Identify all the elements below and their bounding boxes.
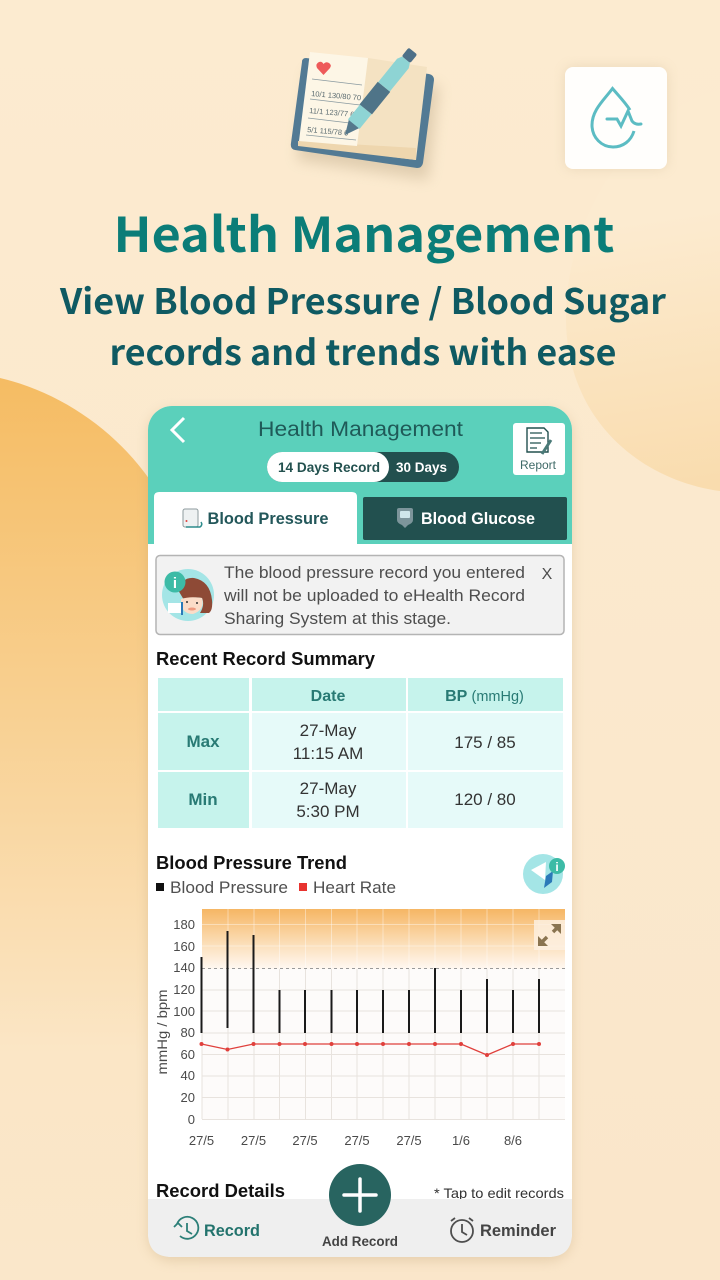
bottom navigation: Record xyxy=(204,1222,260,1240)
icon: notebook and pen xyxy=(291,46,439,180)
bottom navigation xyxy=(148,1199,572,1257)
heading: blood pressure trend: Blood Pressure Trend xyxy=(156,853,347,873)
app header bar xyxy=(148,406,572,544)
x axis labels xyxy=(189,1133,522,1148)
line and bar chart xyxy=(154,909,565,1148)
summary table: Min xyxy=(188,790,218,809)
y axis labels: 160 xyxy=(173,939,195,954)
icon: app droplet tile xyxy=(565,67,667,169)
icon: back arrow xyxy=(172,418,184,442)
y axis labels: 120 xyxy=(173,982,195,997)
icon: notebook and pen: 5/1 115/78 6 xyxy=(307,125,349,138)
y axis labels: 100 xyxy=(173,1004,195,1019)
y axis labels: 40 xyxy=(181,1068,195,1083)
add record button xyxy=(329,1164,391,1226)
summary table: Max xyxy=(186,732,220,751)
y axis labels: 180 xyxy=(173,917,195,932)
subtitle xyxy=(59,274,667,376)
summary table: 175 / 85 xyxy=(454,733,516,752)
summary table: 5:30 PM xyxy=(296,802,360,821)
icon: heart xyxy=(316,62,331,75)
summary table: 11:15 AM xyxy=(293,744,363,763)
screen title: Health Management xyxy=(258,417,463,441)
summary table: Date xyxy=(311,688,345,705)
subtitle: records and trends with ease xyxy=(110,325,616,376)
y axis labels: 60 xyxy=(181,1047,195,1062)
x axis labels: 27/5 xyxy=(344,1133,370,1148)
x axis labels: 27/5 xyxy=(292,1133,318,1148)
period toggle xyxy=(267,452,459,482)
grid xyxy=(202,969,565,1120)
close button: X xyxy=(542,566,553,583)
notice text: The blood pressure record you entered xyxy=(224,564,525,582)
heading: record details: Record Details xyxy=(156,1181,285,1201)
tab: blood glucose xyxy=(363,497,567,540)
icon: info megaphone xyxy=(523,854,565,894)
icon: nurse avatar xyxy=(162,569,214,621)
notice text xyxy=(223,564,525,628)
report button: Report xyxy=(520,458,557,472)
x axis labels: 1/6 xyxy=(452,1133,470,1148)
x axis labels: 27/5 xyxy=(396,1133,422,1148)
add record label: Add Record xyxy=(322,1234,398,1249)
chart legend: Heart Rate xyxy=(313,879,396,897)
summary table: BP (mmHg) xyxy=(445,688,524,705)
report button xyxy=(513,423,565,475)
chart legend: Blood Pressure xyxy=(170,879,288,897)
summary table xyxy=(158,678,563,828)
icon: nurse avatar: i xyxy=(173,575,177,592)
x axis labels: 8/6 xyxy=(504,1133,522,1148)
y axis title: mmHg / bpm xyxy=(154,990,170,1074)
icon: reminder clock xyxy=(451,1218,473,1242)
y axis labels xyxy=(173,917,195,1127)
hint: tap to edit: * Tap to edit records xyxy=(434,1185,564,1201)
chart legend xyxy=(156,879,396,897)
bottom navigation: Reminder xyxy=(480,1222,557,1240)
panel: phone screen xyxy=(148,406,572,1257)
card shadow xyxy=(148,410,572,1261)
tab: blood glucose: Blood Glucose xyxy=(421,510,535,528)
title: Health Management xyxy=(114,196,614,266)
notice text: Sharing System at this stage. xyxy=(224,610,451,628)
heart rate line xyxy=(200,1042,541,1057)
period toggle: 30 Days xyxy=(396,460,447,475)
icon: notebook and pen: 10/1 130/80 70 xyxy=(311,89,361,102)
tab: blood pressure xyxy=(154,492,357,544)
icon: record history xyxy=(174,1217,198,1239)
subtitle: View Blood Pressure / Blood Sugar xyxy=(59,274,667,325)
icon: info megaphone: i xyxy=(555,860,559,874)
y axis labels: 80 xyxy=(181,1025,195,1040)
period toggle: 14 Days Record xyxy=(278,460,380,475)
notice box xyxy=(156,556,564,634)
y axis labels: 0 xyxy=(188,1112,195,1127)
icon: pen xyxy=(339,46,419,140)
y axis labels: 140 xyxy=(173,960,195,975)
notice text: will not be uploaded to eHealth Record xyxy=(223,587,525,605)
blood pressure bars xyxy=(202,931,539,1033)
tab: blood pressure: Blood Pressure xyxy=(208,510,328,528)
x axis labels: 27/5 xyxy=(189,1133,214,1148)
icon: notebook and pen: 11/1 123/77 6 xyxy=(309,106,355,119)
summary table: 27-May xyxy=(300,721,357,740)
y axis labels: 20 xyxy=(181,1090,195,1105)
summary table: 120 / 80 xyxy=(454,790,516,809)
heading: recent record summary: Recent Record Summary xyxy=(156,649,375,669)
x axis labels: 27/5 xyxy=(241,1133,266,1148)
expand button xyxy=(534,920,565,950)
summary table: 27-May xyxy=(300,779,357,798)
